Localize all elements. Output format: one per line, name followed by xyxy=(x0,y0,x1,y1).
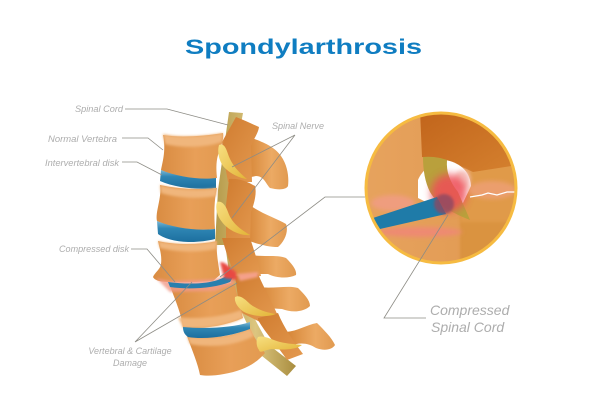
label: vertebral and cartilage damage: Vertebral & Cartilage xyxy=(88,346,172,356)
nerve 3 xyxy=(235,296,276,316)
title: Spondylarthrosis xyxy=(185,35,422,59)
upper dark bone xyxy=(420,114,511,172)
damaged cartilage glow xyxy=(156,272,235,292)
label: normal vertebra: Normal Vertebra xyxy=(48,134,117,144)
spinous processes xyxy=(246,138,335,350)
disk bruise xyxy=(434,194,454,214)
posterior arches xyxy=(222,117,303,360)
canal pink shading xyxy=(454,170,470,190)
label: intervertebral disk: Intervertebral disk xyxy=(45,158,120,168)
compression glow xyxy=(431,174,467,212)
disk 1 xyxy=(160,170,216,189)
spinal cord compression xyxy=(220,262,237,280)
label: spinal nerve: Spinal Nerve xyxy=(272,121,324,131)
blue disk xyxy=(373,197,446,229)
label: compressed spinal cord: Spinal Cord xyxy=(431,319,505,335)
label: compressed spinal cord: Compressed xyxy=(430,302,511,318)
magnified circle xyxy=(364,112,518,264)
label: spinal cord: Spinal Cord xyxy=(75,104,124,114)
vertebra 4 xyxy=(170,282,243,328)
pink disc edge xyxy=(371,195,415,211)
spine illustration xyxy=(153,112,335,376)
disk 3 compressed xyxy=(168,276,233,288)
right fractured bone xyxy=(462,166,512,220)
spinal cord section xyxy=(423,157,470,220)
disk 4 xyxy=(183,322,250,338)
spinal cord xyxy=(215,112,296,376)
nerve 1 xyxy=(218,145,247,179)
label: compressed disk: Compressed disk xyxy=(59,244,129,254)
lower right bone xyxy=(460,218,506,259)
nerve 2 xyxy=(216,202,250,235)
vertebra 5 xyxy=(187,328,265,376)
fractured bone glow xyxy=(468,181,516,199)
crack xyxy=(470,192,516,197)
canal xyxy=(418,160,471,205)
vertebra 1 xyxy=(161,133,223,179)
disk 2 xyxy=(157,221,215,242)
label: vertebral and cartilage damage: Damage xyxy=(113,358,147,368)
circle ring xyxy=(366,113,516,263)
vertebra 3 xyxy=(153,241,220,282)
nerve 4 xyxy=(257,337,302,352)
leader lines xyxy=(122,109,448,342)
labels xyxy=(45,104,511,368)
vertebra 2 xyxy=(157,185,217,230)
fracture xyxy=(237,272,258,281)
